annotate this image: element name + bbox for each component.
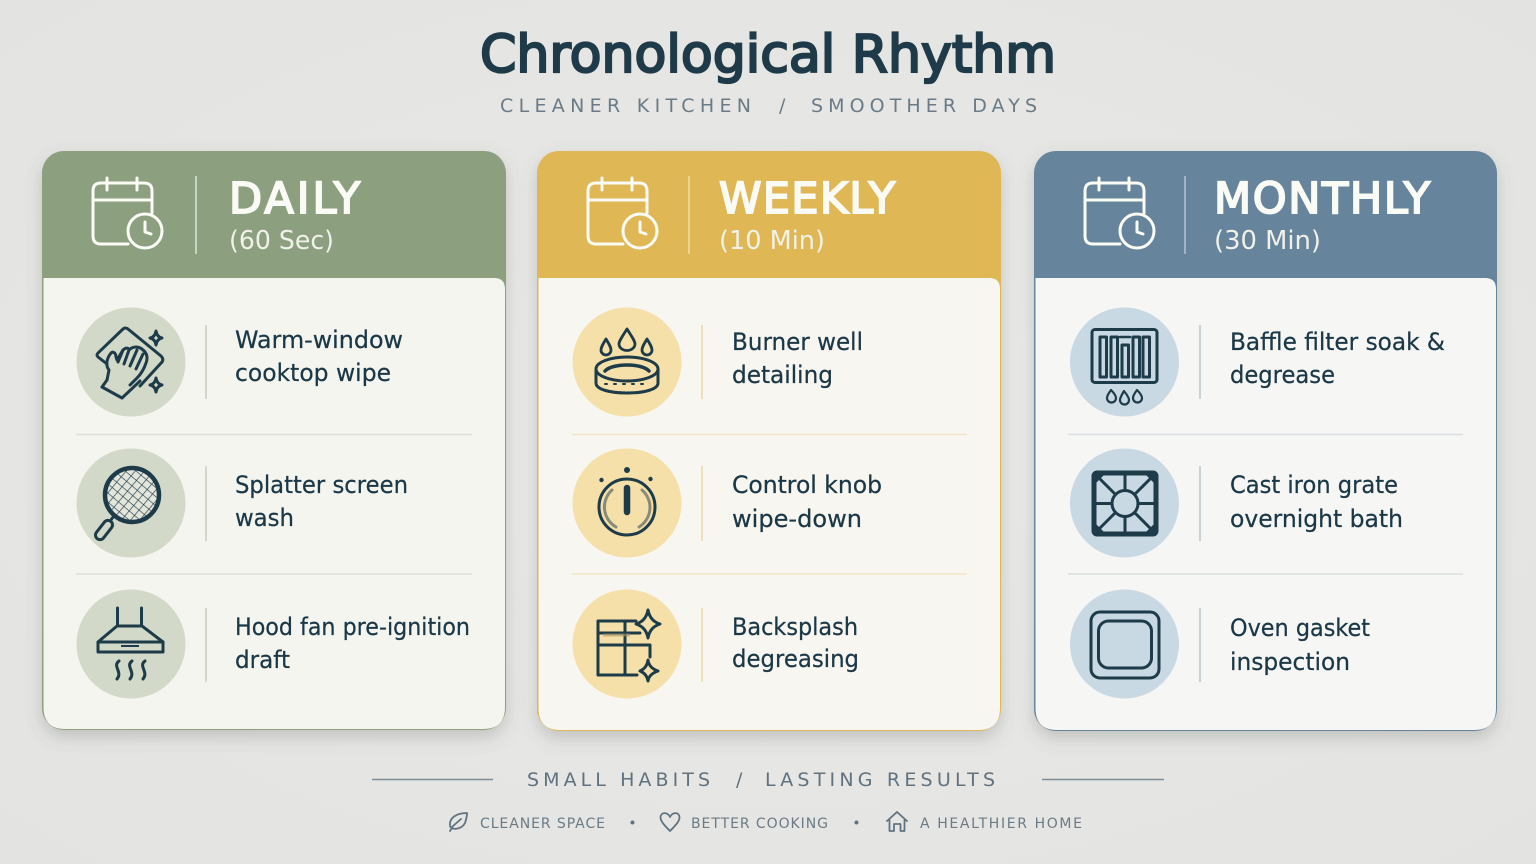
icon: heart [660,813,680,831]
item: cooktop wipe [76,308,403,416]
text: warm-window cooktop wipe: Warm-window [235,326,403,354]
text: hood fan pre-ignition draft: draft [235,646,290,674]
text: splatter screen wash: wash [235,504,294,532]
daily card body [44,278,505,729]
duration: weekly: (10 Min) [719,226,825,256]
text: backsplash degreasing: Backsplash [732,613,858,641]
icon: house [887,812,907,831]
text: control knob wipe-down [732,471,882,533]
icon: baffle filter with drops [1070,308,1179,416]
text: hood fan pre-ignition draft: Hood fan pre-ignition [235,613,470,641]
icon: range hood [76,590,186,698]
text: burner well detailing [732,328,863,389]
text: backsplash degreasing: degreasing [732,645,859,673]
icon: calendar clock [588,178,657,248]
item: burner well [572,308,863,416]
icon: leaf [450,813,467,831]
subtitle [500,95,1037,117]
heading: monthly: MONTHLY [1214,174,1431,224]
text: control knob wipe-down: Control knob [732,471,882,499]
footer tagline: LASTING RESULTS [765,769,995,791]
item: oven gasket [1070,590,1370,698]
label: cleaner space: CLEANER SPACE [480,816,605,832]
footer tagline [527,769,995,791]
heading: daily: DAILY [229,174,361,224]
text: baffle filter soak and degrease: Baffle filter soak & [1230,328,1445,356]
label: a healthier home: A HEALTHIER HOME [920,816,1082,832]
item: splatter screen [76,448,408,558]
panel: daily [42,151,506,730]
text: control knob wipe-down: wipe-down [732,505,862,533]
item: baffle filter [1070,308,1445,416]
panel: weekly [537,151,1001,731]
item: backsplash [572,590,859,698]
monthly card frame [1034,151,1497,731]
text: burner well detailing: detailing [732,361,833,389]
icon: cast iron grate [1070,448,1179,558]
item: cast iron grate [1070,448,1403,558]
title: Chronological Rhythm [480,25,1056,85]
icon: burner with drops [572,308,682,416]
duration: daily: (60 Sec) [229,226,334,256]
text: oven gasket inspection: Oven gasket [1230,614,1370,642]
text: baffle filter soak and degrease [1230,328,1445,389]
text: burner well detailing: Burner well [732,328,863,356]
footer tagline: SMALL HABITS [527,769,710,791]
subtitle: / [779,95,786,117]
icon: calendar clock [93,178,162,248]
text: cast iron grate overnight bath: Cast iron grate [1230,471,1398,499]
header divider [195,176,197,254]
icon: splatter screen [76,448,186,558]
subtitle: SMOOTHER DAYS [811,95,1037,117]
heading: weekly: WEEKLY [719,174,896,224]
weekly card body [538,278,1000,730]
panel: monthly [1034,151,1497,731]
header divider [1184,176,1186,254]
icon: oven gasket [1070,590,1179,698]
monthly card body [1036,278,1496,730]
text: splatter screen wash [235,471,408,532]
text: oven gasket inspection [1230,614,1370,676]
duration: monthly: (30 Min) [1214,226,1321,256]
icon: hand wiping [76,308,186,416]
icon: backsplash tiles [572,590,682,698]
text: hood fan pre-ignition draft [235,613,470,674]
text: cast iron grate overnight bath: overnight bath [1230,505,1403,533]
footer benefits [450,812,1082,832]
label: better cooking: BETTER COOKING [691,816,828,832]
text: warm-window cooktop wipe [235,326,403,387]
item: hood fan [76,590,470,698]
icon: control knob [572,448,682,558]
text: baffle filter soak and degrease: degrease [1230,361,1335,389]
icon: calendar clock [1085,178,1154,248]
subtitle: CLEANER KITCHEN [500,95,751,117]
text: backsplash degreasing [732,613,859,673]
daily card frame [42,151,506,730]
text: oven gasket inspection: inspection [1230,648,1350,676]
item: control knob [572,448,882,558]
footer tagline: / [736,769,743,791]
text: warm-window cooktop wipe: cooktop wipe [235,359,391,387]
text: cast iron grate overnight bath [1230,471,1403,533]
weekly card frame [537,151,1001,731]
header divider [688,176,690,254]
text: splatter screen wash: Splatter screen [235,471,408,499]
